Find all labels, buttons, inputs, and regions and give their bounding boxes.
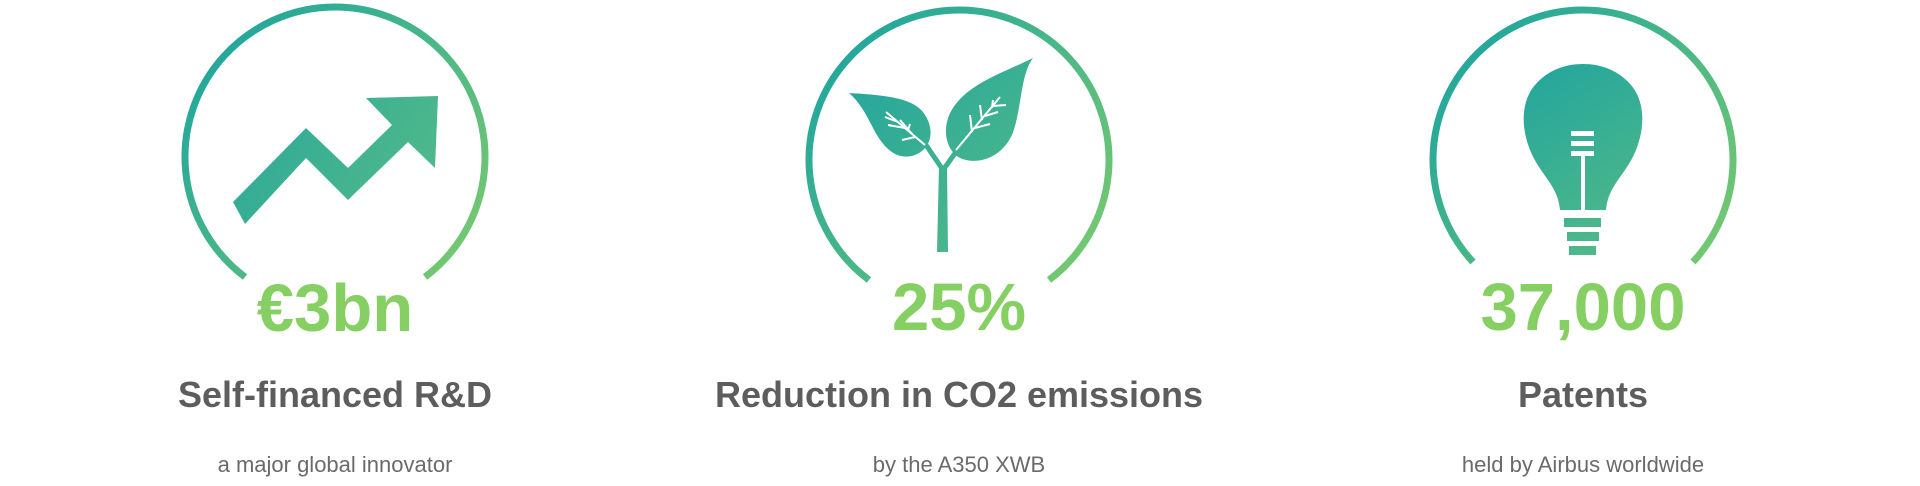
ring 2 — [809, 10, 1109, 280]
text: by the A350 XWB: by the A350 XWB — [873, 452, 1045, 477]
ring 1 — [185, 7, 485, 277]
icon: plant — [849, 58, 1033, 252]
value: 37,000: 37,000 — [1481, 270, 1685, 345]
panel: R&D — [178, 7, 492, 477]
value: €3bn: €3bn — [257, 271, 413, 346]
heading: Patents: Patents — [1518, 374, 1648, 415]
text: held by Airbus worldwide: held by Airbus worldwide — [1462, 452, 1704, 477]
panel: Patents — [1433, 10, 1733, 477]
value: 25%: 25% — [892, 270, 1026, 345]
panel: CO2 — [715, 10, 1203, 477]
heading: Self-financed R&D: Self-financed R&D — [178, 374, 492, 415]
ring 3 — [1433, 10, 1733, 262]
text: a major global innovator: a major global innovator — [218, 452, 452, 477]
icon: rising arrow — [233, 96, 438, 224]
heading: Reduction in CO2 emissions: Reduction in CO2 emissions — [715, 374, 1203, 415]
icon: light bulb — [1524, 64, 1642, 255]
